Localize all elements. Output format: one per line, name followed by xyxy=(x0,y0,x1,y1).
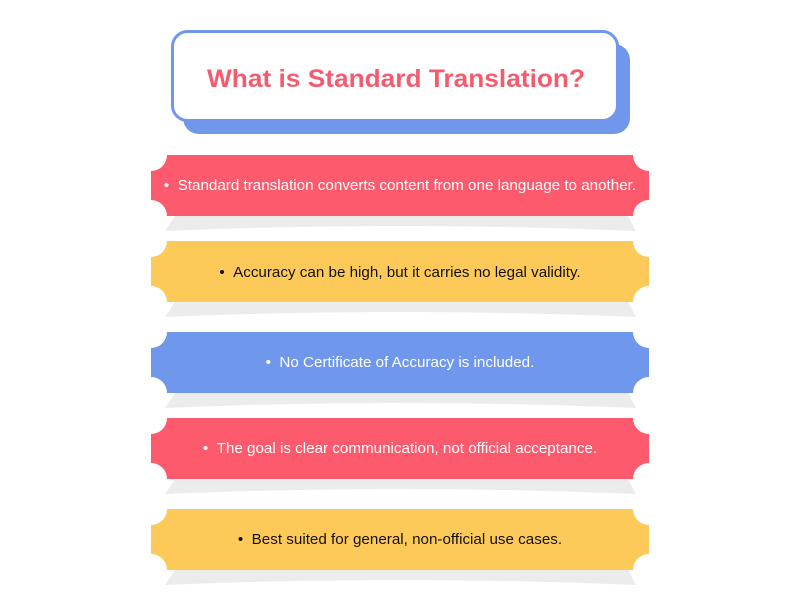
banner 3: • No Certificate of Accuracy is included. xyxy=(266,354,534,371)
banner 5 xyxy=(151,509,649,585)
banner 5: • Best suited for general, non-official use cases. xyxy=(238,531,562,548)
banner 4: • The goal is clear communication, not official acceptance. xyxy=(203,440,597,457)
title box xyxy=(172,32,630,134)
banner 1: • Standard translation converts content from one language to another. xyxy=(164,177,636,194)
banner 3 xyxy=(151,332,649,408)
title: What is Standard Translation? xyxy=(207,65,585,93)
banner 1 xyxy=(151,155,649,231)
banner 2 xyxy=(151,241,649,317)
banner 4 xyxy=(151,418,649,494)
banner 2: • Accuracy can be high, but it carries no legal validity. xyxy=(219,264,581,281)
